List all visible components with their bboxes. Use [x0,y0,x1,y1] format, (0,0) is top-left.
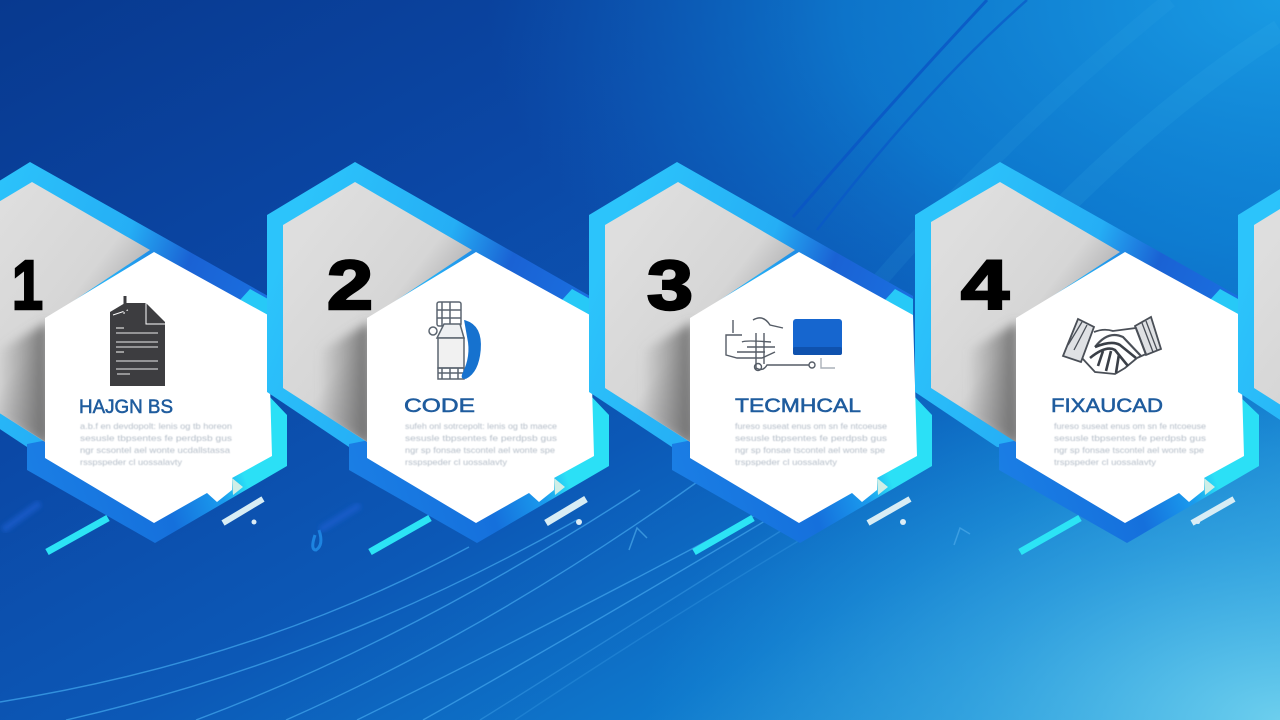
upper frame 2 [267,162,590,460]
body text 4: trspspeder cl uossalavty [1054,457,1157,467]
gray back panel 3 [605,182,795,442]
hexagon step 5 partial [1238,162,1280,460]
lower frame 4 [999,395,1259,543]
cyan corner 2 [562,289,590,318]
hexagon step 4 [915,162,1259,552]
body text 3: fureso suseat enus om sn fe ntcoeuse [735,421,887,431]
accent bars 4 [954,499,1234,552]
body text 1: sesusle tbpsentes fe perdpsb gus [80,433,232,443]
body text 3: sesusle tbpsentes fe perdpsb gus [735,433,887,443]
body text 1 [80,421,232,467]
upper frame 1 [0,162,268,460]
accent bars 2 [313,499,586,552]
icon: robot device [429,302,480,379]
white hexagon 4 [1016,252,1244,523]
shadow 4 [970,322,1018,445]
title 4: FIXAUCAD [1051,396,1163,417]
number 1: 1 [12,246,43,324]
pale corner 2 [554,478,565,495]
hexagon step 2 [267,162,609,552]
number 2: 2 [327,246,373,324]
upper frame 4 [915,162,1238,460]
body text 1: rsspspeder cl uossalavty [80,457,183,467]
body text 2: sesusle tbpsentes fe perdpsb gus [405,433,557,443]
title 1: HAJGN BS [79,397,173,418]
gray back panel 1 [0,182,150,442]
body text 2: sufeh onl sotrcepolt: lenis og tb maece [405,421,557,431]
cyan corner 4 [1210,289,1238,318]
shadow 3 [645,322,693,445]
title 2: CODE [404,396,475,417]
body text 1: ngr scsontel ael wonte ucdallstassa [80,445,230,455]
cyan corner 3 [885,289,913,318]
white hexagon 2 [367,252,594,523]
background curved lines [0,480,830,720]
icon: circuit and blue panel [726,318,842,370]
cyan corner 1 [240,289,268,318]
lower frame 3 [672,395,932,543]
upper frame 5 [1238,162,1280,460]
body text 4: ngr sp fonsae tscontel ael wonte spe [1054,445,1204,455]
accent bars 3 [629,499,910,552]
number 3: 3 [647,246,693,324]
icon: handshake [1063,317,1161,374]
number 4: 4 [961,246,1009,324]
body text 2: ngr sp fonsae tscontel ael wonte spe [405,445,555,455]
title 3: TECMHCAL [735,396,861,417]
body text 1: a.b.f en devdopolt: lenis og tb horeon [80,421,232,431]
pale corner 3 [877,478,888,495]
lower frame 1 [27,395,287,543]
hexagon step 3 [589,162,932,552]
lower frame 2 [349,395,609,543]
gray back panel 4 [931,182,1120,442]
body text 4 [1054,421,1206,467]
body text 2: rsspspeder cl uossalavty [405,457,508,467]
accent bars 1 [3,499,263,552]
body text 3 [735,421,887,467]
background diagonal light streaks [793,0,1280,280]
shadow 2 [322,322,370,445]
gray back panel 5 [1254,182,1280,442]
body text 4: fureso suseat enus om sn fe ntcoeuse [1054,421,1206,431]
body text 4: sesusle tbpsentes fe perdpsb gus [1054,433,1206,443]
gray back panel 2 [283,182,472,442]
pale corner 1 [232,478,243,495]
white hexagon 3 [690,252,917,523]
hexagon step 1 [0,162,287,552]
upper frame 3 [589,162,913,460]
body text 3: ngr sp fonsae tscontel ael wonte spe [735,445,885,455]
body text 2 [405,421,557,467]
pale corner 4 [1204,478,1215,495]
icon: document [110,295,165,386]
white hexagon 1 [45,252,272,523]
shadow 1 [0,322,48,445]
body text 3: trspspeder cl uossalavty [735,457,838,467]
